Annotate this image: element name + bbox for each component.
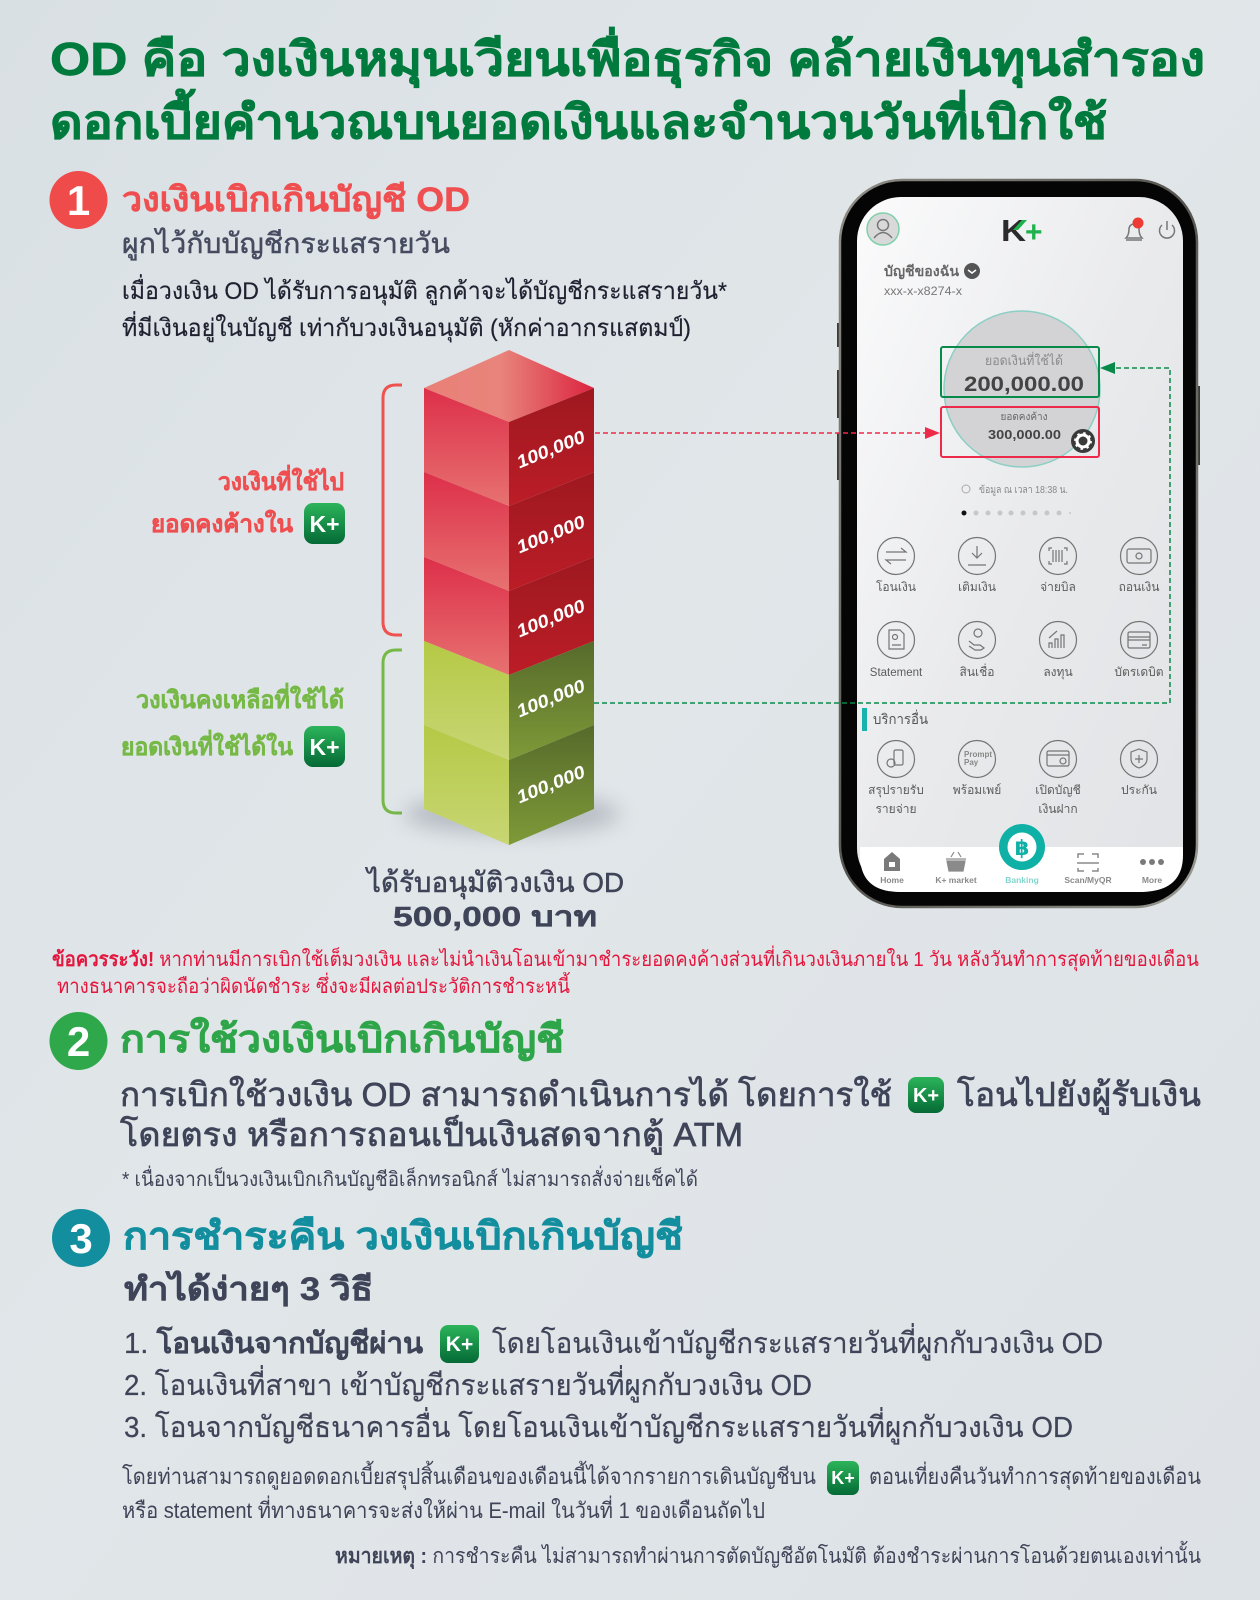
section 2 badge: 2 (67, 1018, 90, 1065)
outstanding balance box: ยอดคงค้าง (1000, 411, 1048, 423)
section 3 heading: การชำระคืน วงเงินเบิกเกินบัญชี (123, 1216, 683, 1258)
bottom tab bar: More (1142, 875, 1162, 885)
interest statement note: โดยท่านสามารถดูยอดดอกเบี้ยสรุปสิ้นเดือนของเดือนนี้ได้จากรายการเดินบัญชีบน (122, 1461, 816, 1490)
menu labels: พร้อมเพย์ (953, 783, 1001, 797)
app header: K (1001, 213, 1027, 248)
section 1 badge: 1 (67, 177, 90, 224)
interest statement note: หรือ statement ที่ทางธนาคารจะส่งให้ผ่าน E-mail ในวันที่ 1 ของเดือนถัดไป (122, 1495, 765, 1523)
section 1 heading: วงเงินเบิกเกินบัญชี OD (122, 181, 470, 220)
repayment methods list: โดยโอนเงินเข้าบัญชีกระแสรายวันที่ผูกกับวงเงิน OD (492, 1323, 1103, 1361)
section 1 badge (50, 171, 108, 229)
title: OD คือ วงเงินหมุนเวียนเพื่อธุรกิจ คล้ายเงินทุนสำรอง (50, 27, 1205, 88)
menu labels: บัตรเดบิต (1114, 665, 1164, 679)
menu labels: โอนเงิน (876, 580, 916, 594)
label: remaining credit (121, 682, 344, 761)
warning text: ทางธนาคารจะถือว่าผิดนัดชำระ ซึ่งจะมีผลต่อประวัติการชำระหนี้ (57, 972, 570, 998)
bottom tab bar: Scan/MyQR (1064, 875, 1112, 885)
phone mockup (837, 180, 1200, 907)
available balance box: ยอดเงินที่ใช้ได้ (985, 352, 1063, 368)
app header (867, 213, 1175, 249)
section 1 description: เมื่อวงเงิน OD ได้รับการอนุมัติ ลูกค้าจะได้บัญชีกระแสรายวัน* (122, 274, 727, 306)
account name (884, 263, 980, 298)
other services heading (862, 708, 928, 731)
section 2 heading: การใช้วงเงินเบิกเกินบัญชี (120, 1017, 564, 1061)
available balance box: 200,000.00 (964, 373, 1084, 396)
repayment methods list: 2. โอนเงินที่สาขา เข้าบัญชีกระแสรายวันที่ผูกกับวงเงิน OD (124, 1365, 812, 1403)
menu labels: รายจ่าย (875, 802, 917, 816)
approved amount caption: 500,000 บาท (393, 901, 597, 932)
balance circle (944, 311, 1100, 467)
repayment methods list (124, 1323, 1103, 1445)
bottom tab bar: ฿ (1015, 837, 1029, 860)
menu labels: เงินฝาก (1038, 802, 1078, 816)
warning text (52, 945, 1199, 998)
outstanding balance box (941, 407, 1099, 457)
update time (962, 484, 1068, 496)
phone body (840, 180, 1197, 907)
icon: K+ app: K+ (831, 1468, 855, 1488)
section 2 description: โดยตรง หรือการถอนเป็นเงินสดจากตู้ ATM (120, 1115, 743, 1155)
menu labels: สรุปรายรับ (868, 783, 924, 798)
section 3 subheading: ทำได้ง่ายๆ 3 วิธี (124, 1270, 373, 1307)
menu labels: Prompt (964, 750, 992, 759)
arrow: available balance (594, 362, 1170, 703)
section 2 description: โอนไปยังผู้รับเงิน (957, 1076, 1201, 1115)
outstanding balance box: 300,000.00 (988, 427, 1061, 442)
section 1 description (122, 274, 727, 343)
stacked credit column: 100,000 (514, 596, 588, 641)
icon: settings gear (1071, 429, 1095, 453)
title: ดอกเบี้ยคำนวณบนยอดเงินและจำนวนวันที่เบิกใช้ (50, 88, 1107, 148)
menu icons (878, 538, 1158, 778)
stacked credit column: 100,000 (514, 512, 588, 557)
icon: K+ app (908, 1077, 944, 1113)
icon: K+ app: K+ (309, 734, 340, 760)
approved amount caption: ได้รับอนุมัติวงเงิน OD (365, 867, 624, 900)
section 2 footnote: * เนื่องจากเป็นวงเงินเบิกเกินบัญชีอิเล็กทรอนิกส์ ไม่สามารถสั่งจ่ายเช็คได้ (122, 1165, 698, 1191)
label: remaining credit: ยอดเงินที่ใช้ได้ใน (121, 729, 294, 761)
menu labels: ประกัน (1121, 783, 1157, 797)
approved amount caption (365, 867, 624, 932)
bottom tab bar: Banking (1005, 875, 1039, 885)
section 2 description: การเบิกใช้วงเงิน OD สามารถดำเนินการได้ โดยการใช้ (120, 1076, 892, 1113)
pagination dots (962, 510, 1071, 516)
menu labels (868, 580, 1164, 816)
section 3 badge: 3 (69, 1215, 93, 1262)
icon: K+ app: K+ (446, 1333, 473, 1356)
label: remaining credit: วงเงินคงเหลือที่ใช้ได้ (136, 682, 344, 714)
stacked credit column: 100,000 (514, 427, 588, 472)
icon: K+ app (304, 726, 345, 767)
bottom tab bar: K+ market (935, 875, 977, 885)
section 1 subheading: ผูกไว้กับบัญชีกระแสรายวัน (122, 228, 450, 261)
section 2 badge (50, 1012, 108, 1070)
menu labels: จ่ายบิล (1040, 580, 1076, 594)
menu labels: ลงทุน (1043, 665, 1073, 680)
interest statement note: ตอนเที่ยงคืนวันทำการสุดท้ายของเดือน (869, 1461, 1201, 1490)
title (50, 27, 1205, 148)
menu labels: Pay (964, 758, 979, 767)
update time: ข้อมูล ณ เวลา 18:38 น. (979, 484, 1068, 496)
bottom tab bar: Home (880, 875, 904, 885)
label: used credit (151, 464, 344, 538)
repayment methods list: 3. โอนจากบัญชีธนาคารอื่น โดยโอนเงินเข้าบัญชีกระแสรายวันที่ผูกกับวงเงิน OD (124, 1407, 1073, 1445)
other services heading: บริการอื่น (873, 710, 928, 727)
bracket: used credit (383, 385, 402, 635)
icon: K+ app: K+ (913, 1085, 939, 1107)
warning text: ข้อควรระวัง! หากท่านมีการเบิกใช้เต็มวงเงิน และไม่นำเงินโอนเข้ามาชำระยอดคงค้างส่วนที่เกินวงเงินภายใน 1 วัน หลังวันทำการสุดท้ายของเดือน (52, 945, 1199, 972)
section 2 description (120, 1076, 1201, 1155)
remark: หมายเหตุ : การชำระคืน ไม่สามารถทำผ่านการตัดบัญชีอัตโนมัติ ต้องชำระผ่านการโอนด้วยตนเองเท่านั้น (335, 1541, 1201, 1570)
bracket: remaining credit (383, 650, 402, 813)
account name: xxx-x-x8274-x (884, 286, 962, 298)
menu labels: เปิดบัญชี (1035, 783, 1081, 797)
repayment methods list: 1. โอนเงินจากบัญชีผ่าน (124, 1325, 423, 1361)
label: used credit: ยอดคงค้างใน (151, 509, 294, 538)
section 1 description: ที่มีเงินอยู่ในบัญชี เท่ากับวงเงินอนุมัติ (หักค่าอากรแสตมป์) (122, 311, 691, 343)
label: used credit: วงเงินที่ใช้ไป (218, 464, 344, 496)
bottom tab bar (860, 824, 1183, 892)
menu labels: เติมเงิน (958, 580, 996, 594)
arrow: outstanding balance (595, 427, 940, 439)
icon: K+ app (440, 1325, 479, 1363)
stacked credit column: 100,000 (514, 762, 588, 807)
available balance box (941, 347, 1099, 397)
menu labels: Statement (870, 667, 923, 679)
stacked credit column (404, 350, 620, 845)
phone buttons (837, 323, 1200, 480)
menu labels: ถอนเงิน (1119, 580, 1159, 594)
phone screen (857, 197, 1183, 892)
section 3 badge (52, 1209, 110, 1267)
app header: + (1025, 216, 1043, 249)
interest statement note (122, 1461, 1201, 1523)
icon: K+ app: K+ (309, 511, 340, 537)
icon: K+ app (304, 503, 345, 544)
account name: บัญชีของฉัน (884, 263, 959, 280)
menu labels: สินเชื่อ (960, 663, 994, 679)
stacked credit column: 100,000 (514, 676, 588, 721)
icon: K+ app (827, 1461, 859, 1495)
